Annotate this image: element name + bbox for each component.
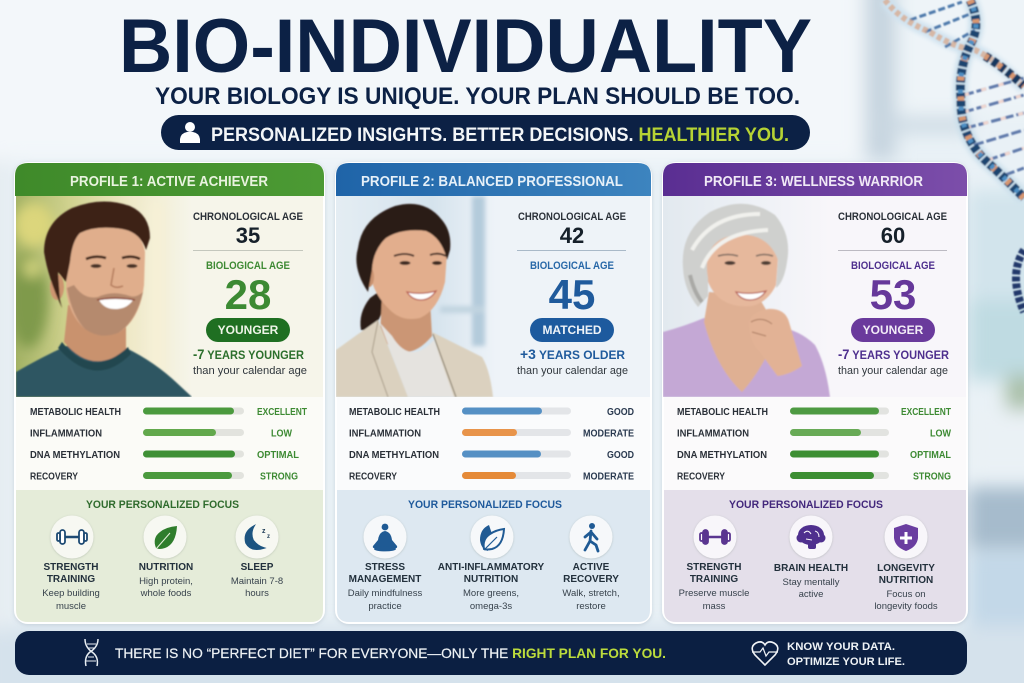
- focus item: longevity: Focus on: [886, 589, 926, 600]
- focus item: active recovery: [562, 562, 620, 612]
- metrics: RECOVERY: [30, 472, 78, 482]
- panel: profile 2: [336, 163, 651, 623]
- focus item: strength: mass: [703, 601, 726, 612]
- age stats: -7 YEARS YOUNGER: [838, 346, 949, 362]
- age stats: YOUNGER: [863, 323, 924, 337]
- metrics: METABOLIC HEALTH: [30, 407, 121, 418]
- focus item: longevity: NUTRITION: [879, 575, 933, 586]
- focus item: brain health: BRAIN HEALTH: [774, 563, 848, 574]
- metrics: DNA METHYLATION: [30, 450, 120, 461]
- card header: PROFILE 3: WELLNESS WARRIOR: [704, 174, 923, 190]
- metrics: DNA METHYLATION: [677, 450, 767, 461]
- icon: DNA: [85, 639, 98, 666]
- age stats: 42: [560, 223, 584, 248]
- icon: moon: z: [262, 528, 266, 535]
- metrics: MODERATE: [583, 472, 634, 482]
- metrics: EXCELLENT: [901, 407, 951, 418]
- focus item: active recovery: ACTIVE: [573, 562, 610, 573]
- focus item: strength: Preserve muscle: [679, 588, 749, 599]
- metrics: MODERATE: [583, 428, 634, 440]
- focus item: stress: practice: [368, 601, 402, 612]
- age stats: than your calendar age: [517, 365, 628, 377]
- focus item: anti-inflammatory: [438, 562, 545, 612]
- card header: PROFILE 2: BALANCED PROFESSIONAL: [361, 174, 623, 190]
- age stats: BIOLOGICAL AGE: [206, 260, 290, 272]
- metrics: INFLAMMATION: [349, 428, 421, 440]
- footer slogan: [787, 641, 905, 668]
- focus item: brain health: active: [799, 589, 823, 600]
- metrics: INFLAMMATION: [30, 428, 102, 440]
- footer slogan: KNOW YOUR DATA.: [787, 641, 895, 653]
- focus item: strength: Keep building: [42, 588, 100, 599]
- metrics: LOW: [930, 428, 952, 440]
- focus item: anti-inflammatory: More greens,: [463, 588, 519, 599]
- icon: dumbbell: [694, 516, 736, 558]
- footer slogan: OPTIMIZE YOUR LIFE.: [787, 656, 905, 668]
- age stats: MATCHED: [542, 323, 602, 337]
- subtitle: YOUR BIOLOGY IS UNIQUE. YOUR PLAN SHOULD BE TOO.: [155, 83, 800, 110]
- focus item: stress: Daily mindfulness: [348, 588, 422, 599]
- footer banner: [15, 631, 967, 675]
- focus section: [16, 490, 323, 622]
- metrics: RECOVERY: [677, 472, 725, 482]
- metrics: METABOLIC HEALTH: [677, 407, 768, 418]
- card header: [663, 163, 967, 196]
- focus item: strength: STRENGTH: [686, 562, 742, 573]
- age stats: [193, 211, 307, 377]
- metrics: GOOD: [607, 450, 634, 461]
- focus item: nutrition: NUTRITION: [139, 562, 193, 573]
- metrics: INFLAMMATION: [677, 428, 749, 440]
- age stats: 28: [225, 271, 271, 318]
- icon: meditation: [364, 516, 406, 558]
- focus item: active recovery: restore: [576, 601, 606, 612]
- focus section: YOUR PERSONALIZED FOCUS: [729, 499, 883, 511]
- DNA helix decoration: [885, 0, 1024, 312]
- focus item: active recovery: RECOVERY: [563, 574, 619, 585]
- portrait: man: [8, 196, 192, 397]
- metrics: DNA METHYLATION: [349, 450, 439, 461]
- icon: moon: [236, 516, 278, 558]
- age stats: CHRONOLOGICAL AGE: [518, 211, 626, 223]
- focus item: strength: TRAINING: [690, 574, 738, 585]
- age stats: 35: [236, 223, 260, 248]
- card body: [15, 163, 324, 623]
- metrics: [677, 407, 952, 482]
- focus item: longevity: longevity foods: [874, 601, 938, 612]
- card header: [15, 163, 324, 196]
- focus item: longevity: LONGEVITY: [877, 563, 935, 574]
- age stats: 53: [870, 271, 916, 318]
- card body: [336, 163, 651, 623]
- portrait: older woman: [663, 196, 831, 397]
- icon: heart with pulse: [752, 642, 778, 665]
- footer message: THERE IS NO “PERFECT DIET” FOR EVERYONE—ONLY THE RIGHT PLAN FOR YOU.: [115, 645, 666, 661]
- metrics: OPTIMAL: [910, 450, 951, 461]
- card header: PROFILE 1: ACTIVE ACHIEVER: [70, 174, 268, 190]
- age stats: CHRONOLOGICAL AGE: [193, 211, 303, 223]
- focus item: strength: muscle: [56, 601, 86, 612]
- focus item: stress: STRESS: [365, 562, 405, 573]
- age stats: [517, 211, 628, 377]
- metrics: OPTIMAL: [257, 450, 299, 461]
- focus item: nutrition: [139, 562, 193, 599]
- focus item: stress: MANAGEMENT: [349, 574, 421, 585]
- tagline text: PERSONALIZED INSIGHTS. BETTER DECISIONS. HEALTHIER YOU.: [211, 125, 789, 146]
- focus item: sleep: SLEEP: [241, 562, 274, 573]
- focus item: nutrition: whole foods: [140, 588, 192, 599]
- metrics: EXCELLENT: [257, 407, 307, 418]
- icon: leaf: [144, 516, 186, 558]
- focus section: [337, 490, 650, 622]
- age stats: than your calendar age: [193, 365, 307, 377]
- metrics: STRONG: [913, 472, 951, 482]
- focus item: anti-inflammatory: omega-3s: [470, 601, 512, 612]
- card header: [336, 163, 651, 196]
- metrics: LOW: [271, 428, 293, 440]
- focus item: strength: [679, 562, 749, 612]
- focus section: YOUR PERSONALIZED FOCUS: [408, 499, 562, 511]
- age stats: +3 YEARS OLDER: [520, 346, 625, 362]
- focus item: stress: [348, 562, 422, 612]
- age stats: 60: [881, 223, 905, 248]
- icon: shield with plus: [884, 516, 928, 558]
- age stats: -7 YEARS YOUNGER: [193, 346, 304, 362]
- portrait: professional woman: [336, 196, 496, 397]
- focus item: anti-inflammatory: NUTRITION: [464, 574, 518, 585]
- age stats: CHRONOLOGICAL AGE: [838, 211, 947, 223]
- panel: profile 1: [8, 163, 324, 623]
- title: BIO-INDIVIDUALITY: [119, 4, 812, 89]
- focus item: strength: [42, 562, 100, 612]
- metrics: METABOLIC HEALTH: [349, 407, 440, 418]
- focus item: strength: TRAINING: [47, 574, 95, 585]
- age stats: than your calendar age: [838, 365, 948, 377]
- panel: profile 3: [663, 163, 967, 623]
- metrics: [349, 407, 634, 482]
- metrics: STRONG: [260, 472, 298, 482]
- focus section: [664, 490, 966, 622]
- focus item: longevity: [874, 563, 938, 612]
- icon: person: [180, 122, 200, 143]
- icon: moon: z: [267, 534, 270, 540]
- icon: brain: [790, 516, 832, 558]
- focus item: active recovery: Walk, stretch,: [562, 588, 620, 599]
- metrics: RECOVERY: [349, 472, 397, 482]
- focus section: YOUR PERSONALIZED FOCUS: [86, 499, 239, 511]
- focus item: sleep: Maintain 7-8: [231, 576, 283, 587]
- metrics: GOOD: [607, 407, 634, 418]
- card body: [663, 163, 967, 623]
- icon: dumbbell: [50, 516, 94, 558]
- focus item: brain health: Stay mentally: [782, 577, 840, 588]
- focus item: strength: STRENGTH: [44, 562, 98, 573]
- age stats: YOUNGER: [218, 323, 279, 337]
- age stats: BIOLOGICAL AGE: [530, 260, 614, 272]
- focus item: brain health: [774, 563, 848, 600]
- metrics: [30, 407, 307, 482]
- focus item: sleep: [231, 562, 283, 599]
- tagline pill: [161, 115, 810, 150]
- focus item: anti-inflammatory: ANTI-INFLAMMATORY: [438, 562, 545, 573]
- focus item: sleep: hours: [245, 588, 269, 599]
- age stats: [838, 211, 949, 377]
- focus item: nutrition: High protein,: [139, 576, 193, 587]
- icon: leaf: [470, 516, 514, 558]
- age stats: BIOLOGICAL AGE: [851, 260, 935, 272]
- icon: walking person: [570, 516, 612, 558]
- age stats: 45: [549, 271, 595, 318]
